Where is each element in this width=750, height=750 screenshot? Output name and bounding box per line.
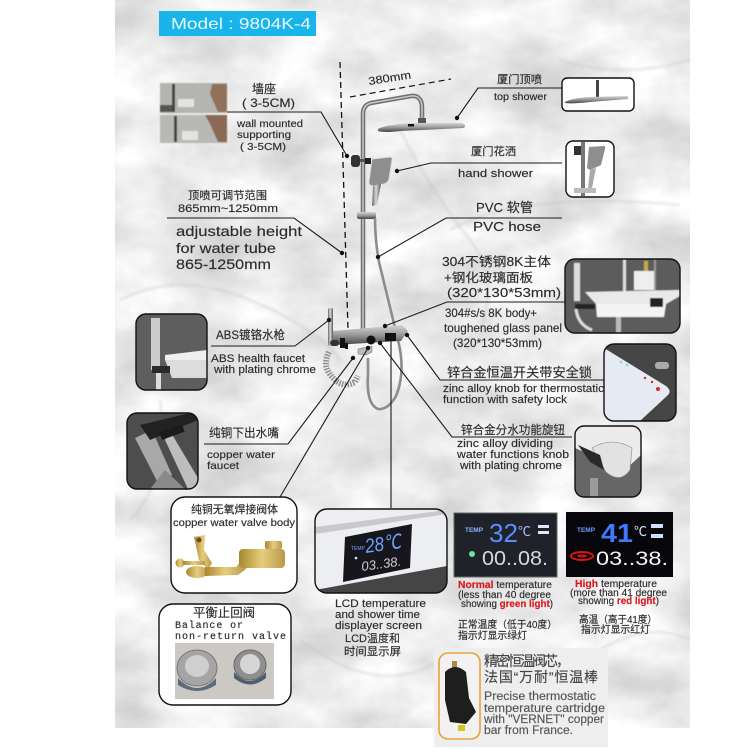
text: hand shower: hand shower [458,168,533,180]
display: high temperature: 03..38. [596,549,668,570]
panel: thermostatic cartridge: 法国“万耐”恒温棒 [484,669,598,685]
photo: panel in bathroom [565,259,680,333]
text: dividing knob: with plating chrome [459,460,562,472]
text: ABS faucet: ABS镀铬水枪 [216,327,285,342]
photo: hand shower [566,141,614,197]
text: top shower [494,72,548,103]
text: dividing knob: water functions knob [456,449,569,461]
text: normal temperature caption: Normal temperature [458,580,552,591]
text: ABS faucet: with plating chrome [213,364,316,376]
text: ABS faucet: ABS health faucet [211,353,305,365]
text: wall mount [236,81,303,153]
text: adjustable height: for water tube [176,240,276,256]
brass valve [176,535,285,578]
text: dividing knob: 锌合金分水功能旋钮 [461,422,565,437]
text: high temperature caption [570,579,667,636]
icon: cartridge [439,653,480,739]
panel: thermostatic cartridge: 精密恒温阀芯， [484,653,570,669]
text: PVC hose: PVC 软管 [476,200,533,215]
photo: LCD screen: TEMP [351,546,366,552]
text: high temperature caption: High temperature [575,579,657,590]
photo: LCD screen: 03..38. [360,554,402,574]
photo: wall mount [160,83,227,143]
valve below shelf [358,346,372,355]
text: stainless body: 304#s/s 8K body+ [445,306,537,320]
display: normal temperature [454,513,557,577]
photo: dividing knob [576,432,640,496]
text: zinc alloy knob: 锌合金恒温开关带安全锁 [447,365,592,380]
riser pipe [363,96,422,330]
text: hand shower: 厦门花洒 [471,144,516,158]
panel outline [127,413,198,489]
text: top shower: 厦门顶喷 [497,72,542,86]
text: zinc alloy knob: zinc alloy knob for thermostatic [443,383,605,395]
text: copper faucet [207,425,279,472]
text: adjustable height: 865mm~1250mm [178,203,278,215]
wall mount [351,155,368,167]
panel: balance valve [159,604,291,705]
photo: LCD screen: 28℃ [363,531,405,558]
text: stainless body: (320*130*53mm) [447,285,561,300]
text: high temperature caption: (more than 41 degree [570,588,667,599]
text: high temperature caption: 高温（高于41度） [579,613,657,626]
panel: copper valve body [171,497,297,593]
panel: thermostatic cartridge: with "VERNET" copper [483,714,604,726]
text: wall mount: wall mounted [236,119,303,130]
valve photos [175,643,274,699]
display: high temperature: TEMP [577,527,596,534]
text: LCD: LCD temperature [335,598,426,610]
hose [368,218,402,409]
display: high temperature [566,512,673,577]
text: adjustable height: 865-1250mm [176,256,271,272]
text: zinc alloy knob: function with safety lock [443,394,568,406]
display: high temperature: ℃ [634,524,647,539]
text: stainless body: +钢化玻璃面板 [444,271,534,285]
text: copper faucet: faucet [207,460,239,472]
slider [357,212,376,219]
photo: copper faucet [127,413,198,489]
marble background [115,0,690,728]
panel outline [315,509,447,593]
text: LCD [335,598,426,658]
text: normal temperature caption: showing green light) [461,599,553,610]
panel: balance valve: non-return valve [175,631,286,643]
text: stainless body: 304不锈钢8K主体 [442,254,552,269]
top shower head [378,118,465,132]
dimension: 380mm: 380mm [368,69,412,88]
panel: copper valve body: 纯铜无氧焊接阀体 [191,502,278,516]
text: wall mount: ( 3-5CM) [242,96,295,110]
text: stainless body: toughened glass panel [444,321,562,335]
text: normal temperature caption [458,580,557,642]
hand shower [365,157,392,206]
dimension: 380mm [350,69,451,97]
display: normal temperature: 00..08. [482,548,548,570]
height dashed guide line [340,62,348,330]
display: normal temperature: TEMP [465,527,484,534]
text: PVC hose [473,200,541,234]
text: top shower: top shower [494,92,548,103]
text: wall mount: supporting [237,130,291,141]
text: adjustable height: 顶喷可调节范围 [188,188,267,202]
panel: thermostatic cartridge [434,648,608,747]
photo: LCD screen [315,509,447,593]
text: dividing knob: zinc alloy dividing [457,438,553,450]
text: PVC hose: PVC hose [473,219,541,234]
text: ABS faucet [211,327,316,376]
text: stainless body [442,254,562,350]
panel: thermostatic cartridge: Precise thermostatic [484,691,596,703]
leader lines and end dots [167,88,604,508]
text: stainless body: (320*130*53mm) [453,336,542,350]
text: LCD: displayer screen [335,620,422,632]
hand-held bidet [328,308,339,346]
panel: thermostatic cartridge: bar from France. [484,725,573,737]
text: high temperature caption: showing red light) [578,596,659,607]
panel: balance valve: 平衡止回阀 [193,606,255,620]
display: normal temperature: 32 [489,518,518,548]
display: high temperature: 41 [601,518,633,548]
text: wall mount: ( 3-5CM) [240,142,286,153]
text: high temperature caption: 指示灯显示红灯 [581,623,650,636]
photo: control panel with indicator lights [604,344,676,421]
text: normal temperature caption: 指示灯显示绿灯 [458,629,527,642]
panel outline [136,314,207,390]
text: LCD: and shower time [335,609,420,621]
text: hand shower [458,144,533,180]
text: normal temperature caption: (less than 40 degree [458,590,551,601]
panel outline [575,426,641,497]
text: copper faucet: 纯铜下出水嘴 [209,425,279,440]
text: LCD: LCD温度和 [345,631,400,645]
text: wall mount: 墙座 [252,81,276,96]
text: adjustable height [176,188,302,272]
panel outline [565,259,680,333]
panel shelf [333,325,408,349]
text: copper faucet: copper water [207,449,276,461]
photo: ABS faucet [136,314,207,390]
panel: thermostatic cartridge: temperature cartridge [484,703,605,715]
panel: balance valve: Balance or [175,620,243,632]
panel outline [604,344,676,421]
display: normal temperature: ℃ [518,524,531,539]
text: normal temperature caption: 正常温度（低于40度） [458,618,557,631]
text: adjustable height: adjustable height [176,223,302,239]
shower column illustration [326,69,465,409]
model badge: Model : 9804K-4 [171,16,311,33]
text: dividing knob [456,422,569,472]
photo: top shower [562,78,634,111]
panel: copper valve body: copper water valve body [173,517,296,529]
text: zinc alloy knob [443,365,605,406]
text: LCD: 时间显示屏 [344,645,401,658]
model badge [159,11,316,36]
coil hose [326,352,358,385]
